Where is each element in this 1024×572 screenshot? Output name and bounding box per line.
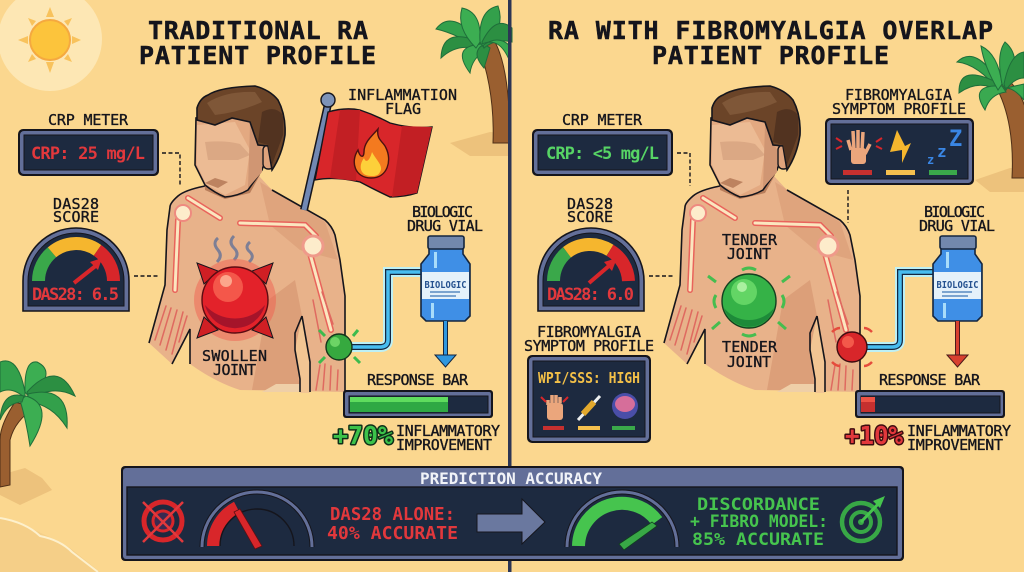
tender joint: TENDER (722, 338, 778, 356)
swollen joint (194, 236, 276, 379)
CRP meter: CRP METER (562, 111, 643, 129)
drug vial and tube: DRUG VIAL (919, 217, 995, 235)
symptom profile top: z (937, 142, 947, 161)
drug vial and tube: DRUG VIAL (407, 217, 483, 235)
text: discordance model accuracy: + FIBRO MODEL: (690, 512, 828, 532)
text: DAS28 alone accuracy (327, 504, 458, 544)
DAS28 gauge: SCORE (567, 208, 613, 226)
title: RA WITH FIBROMYALGIA OVERLAP (548, 16, 993, 45)
text: discordance model accuracy (690, 495, 828, 550)
DAS28 gauge: SCORE (53, 208, 99, 226)
drug vial and tube (864, 203, 995, 347)
response bar (855, 371, 1005, 418)
symptom profile bottom: FIBROMYALGIA (537, 323, 641, 341)
DAS28 gauge: DAS28 (53, 195, 99, 213)
symptom profile top (825, 86, 974, 185)
response bar: RESPONSE BAR (367, 371, 469, 389)
panel: prediction accuracy (121, 466, 904, 561)
symptom profile bottom (524, 323, 654, 443)
heading: PREDICTION ACCURACY (420, 469, 602, 488)
improvement readout: +70% (333, 421, 393, 450)
swollen joint: SWOLLEN (202, 347, 267, 365)
sand shadow (0, 468, 52, 505)
improvement readout: IMPROVEMENT (396, 436, 492, 454)
response bar (343, 371, 493, 418)
wrist joint (832, 328, 872, 366)
sun (0, 0, 102, 91)
tender joint: JOINT (727, 353, 771, 371)
patient figure (149, 86, 345, 393)
beach corner (0, 518, 100, 572)
symptom profile top: Z (949, 127, 962, 152)
improvement readout: IMPROVEMENT (907, 436, 1003, 454)
panel: traditional RA (18, 16, 500, 454)
symptom profile top: FIBROMYALGIA (845, 86, 952, 104)
DAS28 gauge: DAS28: 6.5 (32, 285, 119, 305)
CRP meter (18, 111, 159, 176)
wrist joint (319, 330, 360, 363)
title: TRADITIONAL RA (148, 16, 368, 45)
gauge: DAS28 alone (202, 492, 312, 549)
divider (508, 0, 512, 572)
response arrow (435, 321, 456, 367)
text: DAS28 alone accuracy: 40% ACCURATE (327, 523, 458, 544)
DAS28 gauge: DAS28 (567, 195, 613, 213)
flag label line 2: FLAG (385, 100, 421, 118)
palm tree: right (957, 42, 1024, 192)
title (548, 16, 993, 70)
palm tree: top centre (436, 6, 512, 156)
improvement readout (845, 421, 1011, 454)
CRP meter: CRP: <5 mg/L (546, 144, 659, 164)
title: PATIENT PROFILE (139, 41, 376, 70)
DAS28 gauge (538, 195, 644, 311)
gauge: discordance model (567, 492, 677, 550)
swollen joint: JOINT (213, 361, 256, 379)
palm tree: bottom left (0, 361, 75, 487)
improvement readout: INFLAMMATORY (396, 422, 500, 440)
drug vial and tube (352, 203, 483, 347)
symptom profile top: z (927, 153, 934, 167)
symptom profile top: SYMPTOM PROFILE (832, 100, 966, 118)
panel: RA with fibromyalgia overlap (524, 16, 1011, 454)
CRP meter: CRP: 25 mg/L (31, 144, 145, 164)
flag label: INFLAMMATION (348, 86, 457, 104)
drug vial and tube: BIOLOGIC (412, 203, 473, 221)
CRP meter: CRP METER (48, 111, 129, 129)
tender joint: TENDER (722, 231, 778, 249)
title: PATIENT PROFILE (652, 41, 889, 70)
improvement readout: +10% (845, 421, 903, 450)
title (139, 16, 376, 70)
symptom profile bottom: SYMPTOM PROFILE (524, 337, 654, 355)
CRP meter (532, 111, 673, 176)
tender joint (708, 231, 790, 371)
symptom profile bottom: WPI/SSS: HIGH (538, 369, 640, 387)
arrow (477, 499, 545, 544)
improvement readout (333, 421, 500, 454)
icon: crossed target (143, 502, 183, 542)
flag (304, 93, 432, 210)
text: discordance model accuracy: 85% ACCURATE (692, 530, 824, 550)
response bar: RESPONSE BAR (879, 371, 981, 389)
patient figure (664, 86, 860, 393)
DAS28 gauge: DAS28: 6.0 (547, 285, 634, 305)
text: discordance model accuracy: DISCORDANCE (697, 495, 820, 515)
text: DAS28 alone accuracy: DAS28 ALONE: (330, 504, 455, 525)
icon: bullseye target (842, 496, 885, 541)
response arrow (947, 321, 968, 367)
tender joint: JOINT (727, 245, 771, 263)
improvement readout: INFLAMMATORY (907, 422, 1011, 440)
drug vial and tube: BIOLOGIC (924, 203, 985, 221)
DAS28 gauge (23, 195, 129, 311)
